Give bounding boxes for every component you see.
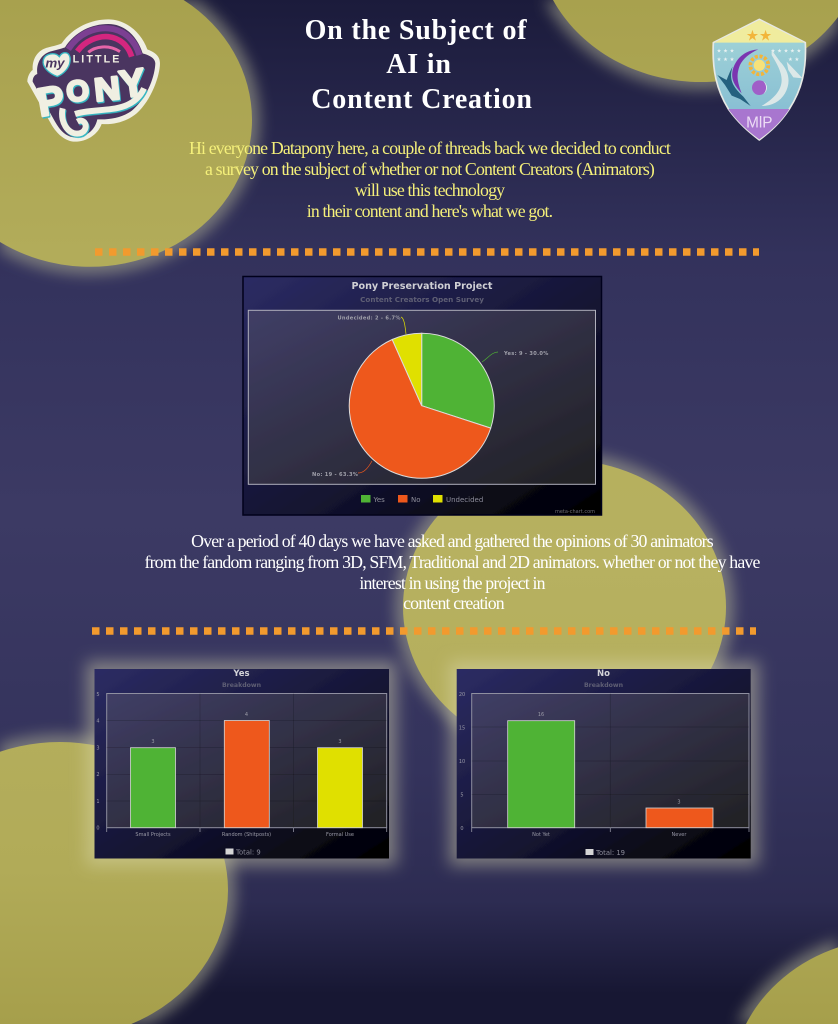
bar chart: No breakdown: 16	[538, 712, 544, 718]
title: Content Creation	[311, 84, 533, 115]
bar chart: Yes breakdown: 5	[96, 692, 100, 698]
bar chart: Yes breakdown: Formal Use	[326, 832, 354, 838]
pie labels	[312, 316, 549, 478]
pie legend: No	[411, 496, 421, 504]
icon: shield crest: ★ ★ ★ ★ ★	[771, 48, 802, 54]
bar chart: No breakdown	[449, 661, 759, 866]
pie plot area	[248, 310, 596, 484]
body text: from the fandom ranging from 3D, SFM, Traditional and 2D animators. whether or not they have	[144, 552, 760, 572]
bar chart: No breakdown: 10	[459, 759, 465, 765]
intro text: in their content and here's what we got.	[307, 201, 553, 221]
logo: My Little Pony	[27, 19, 160, 142]
bar chart: Yes breakdown: Random (Shitposts)	[222, 832, 271, 838]
bar chart: Yes breakdown: 3	[96, 746, 100, 752]
pie labels: Yes: 9 - 30.0%	[503, 351, 549, 357]
intro text: a survey on the subject of whether or not Content Creators (Animators)	[205, 159, 655, 180]
logo wordmark: O	[65, 74, 91, 109]
pie chart subtitle: Content Creators Open Survey	[360, 295, 484, 304]
logo wordmark: LITTLE	[73, 54, 119, 66]
body text	[144, 531, 760, 613]
intro text: will use this technology	[355, 180, 505, 200]
pie chart panel	[243, 276, 602, 515]
bar chart: No breakdown: Never	[672, 832, 687, 838]
bar chart: No breakdown: 20	[459, 692, 465, 698]
pie labels: No: 19 - 63.3%	[312, 472, 358, 478]
bar chart: No breakdown: 15	[459, 726, 465, 732]
divider top	[95, 248, 759, 256]
bar chart: No breakdown: Total: 19	[595, 849, 625, 857]
pie labels: Undecided: 2 - 6.7%	[338, 316, 401, 322]
title: AI in	[386, 49, 452, 80]
icon: shield crest	[713, 19, 806, 140]
pie chart title: Pony Preservation Project	[351, 281, 493, 292]
icon: shield crest: ★ ★ ★	[717, 48, 735, 54]
pie	[349, 333, 494, 478]
chart credit: meta-chart.com	[555, 509, 595, 515]
bar chart: No breakdown: 5	[460, 792, 464, 798]
bar chart: Yes breakdown: Small Projects	[135, 832, 171, 838]
logo wordmark: N	[92, 70, 122, 109]
intro text: Hi everyone Datapony here, a couple of threads back we decided to conduct	[189, 138, 671, 158]
bar chart: Yes breakdown: 4	[96, 718, 100, 724]
bar chart: Yes breakdown: Yes	[232, 669, 250, 679]
title	[305, 15, 533, 115]
bar chart: Yes breakdown: Breakdown	[222, 682, 261, 689]
pie legend: Undecided	[446, 496, 483, 504]
icon: shield crest: MlP	[746, 114, 773, 131]
title: On the Subject of	[305, 15, 527, 46]
body text: Over a period of 40 days we have asked and gathered the opinions of 30 animators	[191, 531, 714, 551]
icon: shield crest: ★ ★	[788, 57, 799, 63]
bar chart: Yes breakdown: 2	[96, 772, 100, 778]
logo wordmark: Y	[117, 61, 148, 107]
bar chart: Yes breakdown: Total: 9	[235, 848, 261, 856]
bar chart: No breakdown: No	[597, 669, 610, 679]
divider middle	[92, 627, 756, 635]
body text: interest in using the project in	[359, 573, 546, 593]
bar chart: Yes breakdown: 0	[96, 826, 100, 832]
logo wordmark	[34, 54, 148, 134]
body text: content creation	[403, 593, 505, 613]
bar chart: Yes breakdown: 4	[245, 712, 248, 718]
bar chart: No breakdown: Not Yet	[532, 832, 550, 838]
bar chart: No breakdown: 3	[677, 800, 681, 806]
bar chart: No breakdown: Breakdown	[584, 682, 623, 689]
bar chart: Yes breakdown: 1	[96, 799, 100, 805]
bar chart: Yes breakdown: 3	[151, 739, 155, 745]
pie legend	[361, 495, 483, 504]
icon: shield crest: ★ ★ ★	[717, 57, 735, 63]
intro text	[189, 138, 671, 221]
logo wordmark: P	[34, 78, 68, 126]
pie legend: Yes	[372, 496, 385, 504]
logo wordmark: my	[45, 55, 65, 70]
bar chart: Yes breakdown: 3	[338, 739, 342, 745]
icon: shield crest: ★★	[746, 27, 772, 44]
bar chart: No breakdown: 0	[460, 826, 464, 832]
bar chart: Yes breakdown	[86, 661, 397, 866]
